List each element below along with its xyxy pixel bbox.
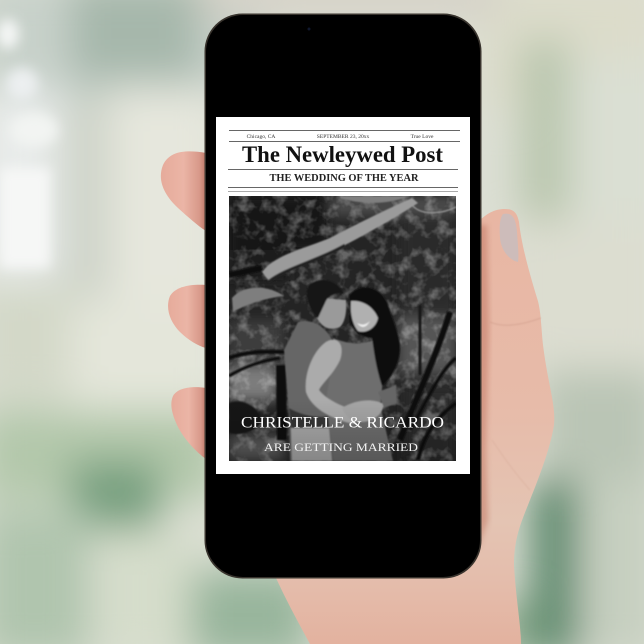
fingers <box>161 151 206 459</box>
hand and thumb <box>276 209 554 644</box>
woman dress <box>326 338 393 461</box>
tree branch <box>229 196 456 460</box>
icon: front camera <box>308 28 310 30</box>
newspaper title: The Newleywed Post <box>242 142 443 167</box>
newspaper card <box>216 117 470 474</box>
finger: ring <box>171 387 206 459</box>
headline: THE WEDDING OF THE YEAR <box>270 172 419 184</box>
man head <box>317 298 346 329</box>
foliage texture <box>229 196 456 461</box>
subheading: ARE GETTING MARRIED <box>264 440 418 454</box>
couple names: CHRISTELLE & RICARDO <box>241 414 444 432</box>
dateline: True Love <box>411 134 434 140</box>
finger: middle <box>168 285 206 348</box>
woman arm <box>306 340 360 424</box>
couple <box>284 280 400 461</box>
man torso <box>283 320 334 461</box>
black and white couple photo <box>229 196 456 461</box>
finger: index <box>161 151 206 231</box>
phone body <box>204 14 482 578</box>
woman face <box>351 301 378 332</box>
icon: thumbnail <box>500 214 518 262</box>
dateline: Chicago, CA <box>247 134 275 140</box>
hands <box>342 401 384 422</box>
masthead rules <box>228 130 460 192</box>
dateline <box>247 134 434 140</box>
dateline: SEPTEMBER 23, 20xx <box>317 134 369 140</box>
woman hair <box>349 287 400 386</box>
